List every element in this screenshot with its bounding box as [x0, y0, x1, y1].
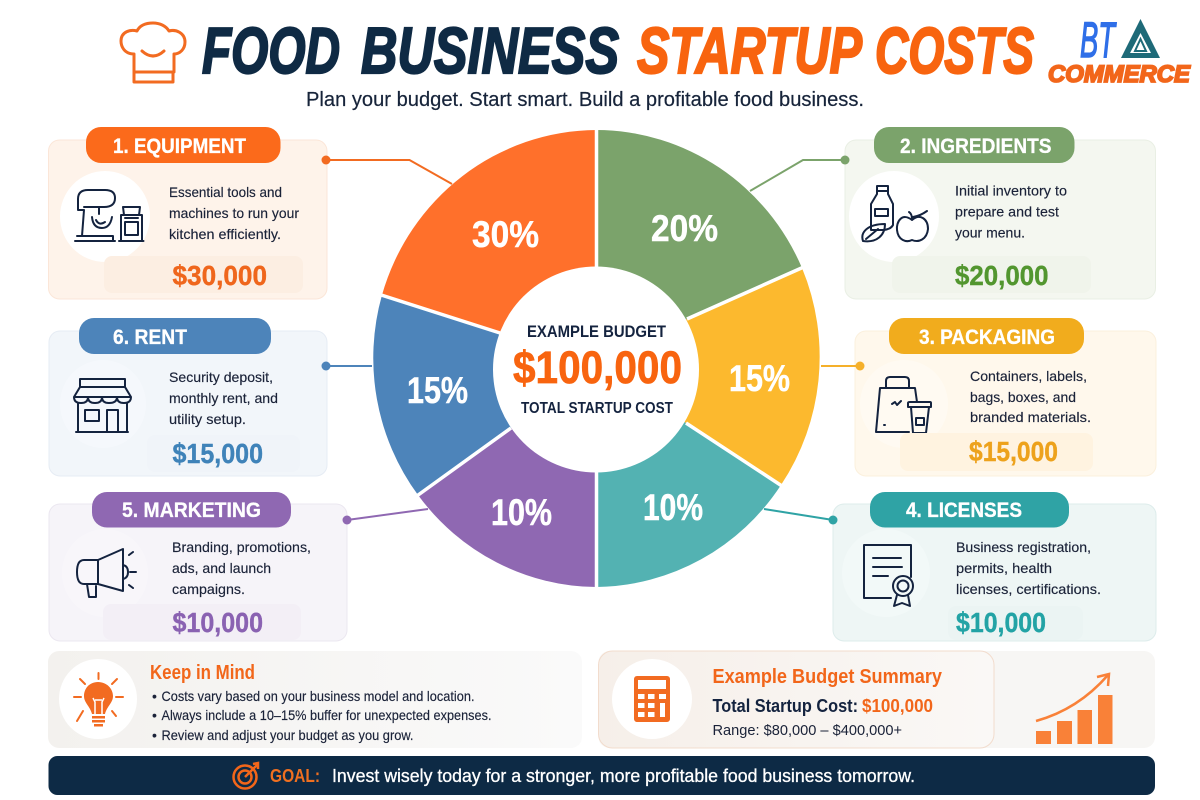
percent labels: 30% [472, 214, 539, 255]
logo: BT Commerce: BT [1080, 12, 1117, 68]
heading pill: licenses [870, 492, 1069, 528]
description: equipment [169, 184, 299, 242]
description: packaging: Containers, labels, [970, 368, 1087, 384]
title: COSTS [875, 14, 1034, 87]
icon: light bulb [59, 659, 137, 739]
bullet list: • [152, 707, 157, 723]
segment: licenses 10% [596, 369, 781, 587]
goal message: Invest wisely today for a stronger, more profitable food business tomorrow. [332, 766, 915, 786]
center label: TOTAL STARTUP COST [521, 400, 673, 417]
amount: packaging: $15,000 [969, 436, 1058, 467]
bullet list [152, 688, 492, 743]
center label: EXAMPLE BUDGET [527, 322, 667, 341]
heading pill: ingredients: 2. INGREDIENTS [900, 135, 1052, 158]
icon: bottle, apple and leaf [849, 171, 939, 262]
heading pill: equipment: 1. EQUIPMENT [113, 135, 246, 158]
panel: 6 rent [49, 318, 372, 476]
title [202, 14, 1034, 87]
heading pill: marketing [92, 492, 291, 528]
leader line: marketing [342, 509, 428, 524]
heading pill: packaging: 3. PACKAGING [919, 326, 1055, 349]
description: ingredients: prepare and test [955, 204, 1059, 220]
description: rent: utility setup. [169, 411, 246, 427]
panel: 2 ingredients [750, 127, 1156, 299]
description: ingredients [955, 182, 1067, 240]
description: licenses: Business registration, [956, 539, 1091, 555]
goal banner [48, 756, 1155, 795]
icon: target [234, 763, 258, 788]
heading pill: rent: 6. RENT [113, 326, 187, 349]
subtitle: Plan your budget. Start smart. Build a profitable food business. [306, 89, 864, 111]
icon: megaphone [62, 529, 148, 617]
description: ingredients: Initial inventory to [955, 182, 1067, 198]
description: packaging: branded materials. [970, 409, 1091, 425]
description: rent: monthly rent, and [169, 390, 278, 406]
icon: stand mixer and oven [60, 171, 150, 262]
heading pill: ingredients [874, 127, 1074, 163]
description: marketing: ads, and launch [172, 560, 271, 576]
description: packaging [970, 368, 1091, 425]
description: marketing: Branding, promotions, [172, 539, 311, 555]
heading pill: licenses: 4. LICENSES [906, 499, 1022, 522]
bullet list: Always include a 10–15% buffer for unexpected expenses. [162, 707, 492, 723]
percent labels: 10% [491, 492, 552, 533]
amount: ingredients: $20,000 [955, 260, 1048, 291]
icon: chef hat [121, 23, 185, 82]
percent labels: 10% [643, 487, 703, 528]
bullet list: • [152, 688, 157, 704]
title: FOOD [202, 14, 340, 87]
icon: growth bar chart with arrow [1036, 674, 1112, 744]
title: STARTUP [637, 14, 862, 87]
panel: 1 equipment [48, 127, 452, 299]
amount: rent: $15,000 [172, 438, 263, 469]
bullet list: Costs vary based on your business model and location. [162, 688, 474, 704]
heading pill: rent [79, 318, 271, 354]
description: equipment: Essential tools and [169, 184, 282, 200]
leader line: packaging [821, 362, 864, 370]
description: marketing: campaigns. [172, 581, 245, 597]
total startup cost: Total Startup Cost: [712, 696, 858, 716]
heading pill: marketing: 5. MARKETING [122, 499, 261, 522]
description: equipment: kitchen efficiently. [169, 226, 281, 242]
segment: ingredients 20% [596, 130, 802, 369]
segment: rent 15% [373, 295, 596, 495]
amount: equipment [104, 256, 303, 293]
percent labels [407, 208, 790, 533]
donut chart [373, 128, 820, 590]
amount: packaging [900, 433, 1093, 471]
amount: licenses: $10,000 [956, 607, 1046, 638]
segment: marketing 10% [418, 369, 596, 587]
amount: rent [147, 435, 300, 472]
description: packaging: bags, boxes, and [970, 389, 1076, 405]
leader line: rent [322, 362, 372, 370]
amount: marketing [103, 604, 301, 640]
panel: example budget summary [598, 651, 1155, 748]
logo: BT Commerce: COMMERCE [1048, 61, 1191, 88]
description: marketing [172, 539, 311, 597]
percent labels: 15% [407, 370, 468, 411]
center label: $100,000 [513, 342, 682, 393]
percent labels: 20% [651, 208, 718, 249]
icon: calculator [612, 659, 692, 739]
icon: bag and cup [860, 360, 948, 448]
range: Range: $80,000 – $400,000+ [712, 722, 902, 739]
description: equipment: machines to run your [169, 205, 299, 221]
panel: 5 marketing [49, 492, 428, 641]
leader line: equipment [322, 156, 452, 184]
leader line: licenses [764, 509, 838, 524]
panel: 3 packaging [821, 318, 1156, 476]
logo: BT Commerce [1048, 12, 1191, 88]
description: rent: Security deposit, [169, 369, 273, 385]
description: rent [169, 369, 278, 427]
bullet list: Review and adjust your budget as you grow. [162, 727, 414, 743]
description: licenses [956, 539, 1101, 597]
amount: licenses [948, 606, 1083, 640]
leader line: ingredients [750, 156, 850, 191]
description: licenses: permits, health [956, 560, 1052, 576]
amount: ingredients [892, 256, 1091, 293]
summary card [598, 651, 994, 748]
amount: equipment: $30,000 [172, 260, 267, 291]
center label [513, 322, 682, 417]
description: ingredients: your menu. [955, 224, 1025, 240]
bullet list: • [152, 727, 157, 743]
total startup cost: $100,000 [862, 696, 933, 716]
segment: packaging 15% [596, 268, 820, 485]
amount: marketing: $10,000 [172, 607, 263, 638]
panel: keep in mind [48, 651, 582, 748]
icon: certificate [842, 529, 930, 617]
heading pill: equipment [86, 127, 280, 163]
heading: summary: Example Budget Summary [712, 666, 943, 688]
icon: storefront [60, 360, 146, 448]
goal label: GOAL: [270, 766, 320, 786]
panel: 4 licenses [764, 492, 1156, 641]
segment: equipment 30% [382, 130, 596, 369]
heading pill: packaging [889, 318, 1084, 354]
heading: keep in mind: Keep in Mind [150, 662, 255, 684]
percent labels: 15% [729, 358, 790, 399]
description: licenses: licenses, certifications. [956, 581, 1101, 597]
title: BUSINESS [361, 14, 619, 87]
